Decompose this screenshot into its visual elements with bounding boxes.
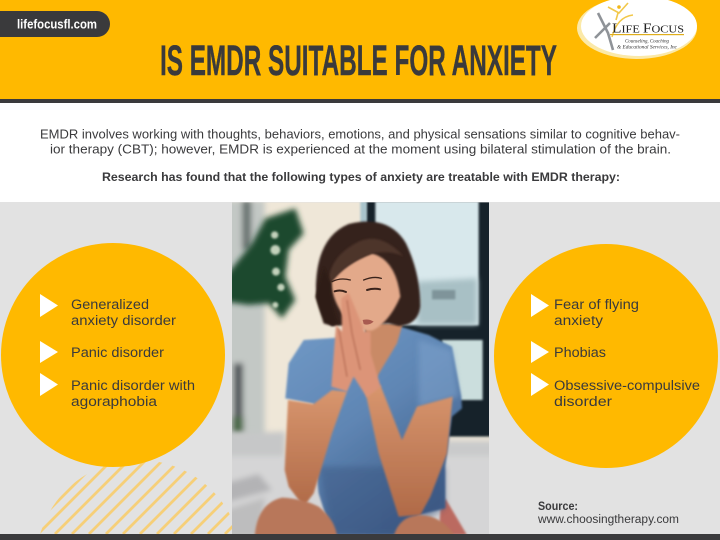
plant <box>225 208 304 318</box>
eyes and brows <box>332 277 381 292</box>
logo: Counseling, Coaching <box>625 40 669 44</box>
logo: & Educational Services, Inc <box>617 46 678 50</box>
hatched decoration <box>40 462 232 534</box>
icon: bullet arrow <box>531 341 549 363</box>
header band <box>0 0 720 103</box>
logo: LIFE FOCUS <box>612 22 684 36</box>
hair front <box>329 239 404 283</box>
t-shirt <box>285 327 462 535</box>
icon: bullet arrow <box>531 294 549 317</box>
intro paragraph: ior therapy (CBT); however, EMDR is experienced at the moment using bilateral stimulation of the brain. <box>50 142 671 156</box>
list item: generalized anxiety disorder: Generalized <box>71 297 149 312</box>
list item: generalized anxiety disorder <box>71 297 177 328</box>
list item: phobias: Phobias <box>554 345 606 360</box>
panel: left circle <box>1 243 225 467</box>
hands <box>331 293 381 397</box>
intro paragraph: EMDR involves working with thoughts, behaviors, emotions, and physical sensations similar to cognitive behav- <box>40 128 680 142</box>
list item: panic disorder with agoraphobia: agoraphobia <box>71 394 158 409</box>
list item: panic disorder with agoraphobia <box>71 378 195 409</box>
panel: right circle <box>494 244 718 468</box>
footer bar <box>0 534 720 540</box>
list item: fear of flying anxiety: Fear of flying <box>554 297 639 312</box>
photo: woman in blue t-shirt with hands pressed to her face <box>225 200 495 539</box>
icon: bullet arrow <box>40 373 58 396</box>
icon: bullet arrow <box>40 294 58 317</box>
grey panel <box>0 202 720 534</box>
icon: bullet arrow <box>40 341 58 363</box>
pink shorts <box>439 498 467 535</box>
website pill <box>0 11 110 37</box>
list item: obsessive-compulsive disorder: disorder <box>554 394 613 409</box>
intro paragraph <box>40 128 680 156</box>
hair back <box>316 221 420 326</box>
list item: obsessive-compulsive disorder: Obsessive-compulsive <box>554 378 700 393</box>
logo <box>577 0 697 59</box>
list item: panic disorder: Panic disorder <box>71 345 165 360</box>
icon: bullet arrow <box>531 373 549 396</box>
list item: obsessive-compulsive disorder <box>554 378 700 409</box>
source credit: Source: <box>538 501 578 513</box>
lips <box>363 319 374 325</box>
source credit: www.choosingtherapy.com <box>537 514 679 526</box>
research statement: Research has found that the following types of anxiety are treatable with EMDR therapy: <box>102 170 620 184</box>
face <box>331 253 400 331</box>
list item: fear of flying anxiety: anxiety <box>554 313 603 328</box>
neck and chest <box>365 323 403 378</box>
left window and curtain <box>232 202 267 436</box>
knees <box>255 498 455 537</box>
source credit <box>537 501 679 526</box>
list item: fear of flying anxiety <box>554 297 639 328</box>
list item: generalized anxiety disorder: anxiety disorder <box>71 313 177 328</box>
arms <box>285 385 453 517</box>
right window and frame <box>360 200 492 437</box>
bed <box>225 432 495 539</box>
website pill: lifefocusfl.com <box>17 16 97 32</box>
list item: panic disorder with agoraphobia: Panic disorder with <box>71 378 195 393</box>
